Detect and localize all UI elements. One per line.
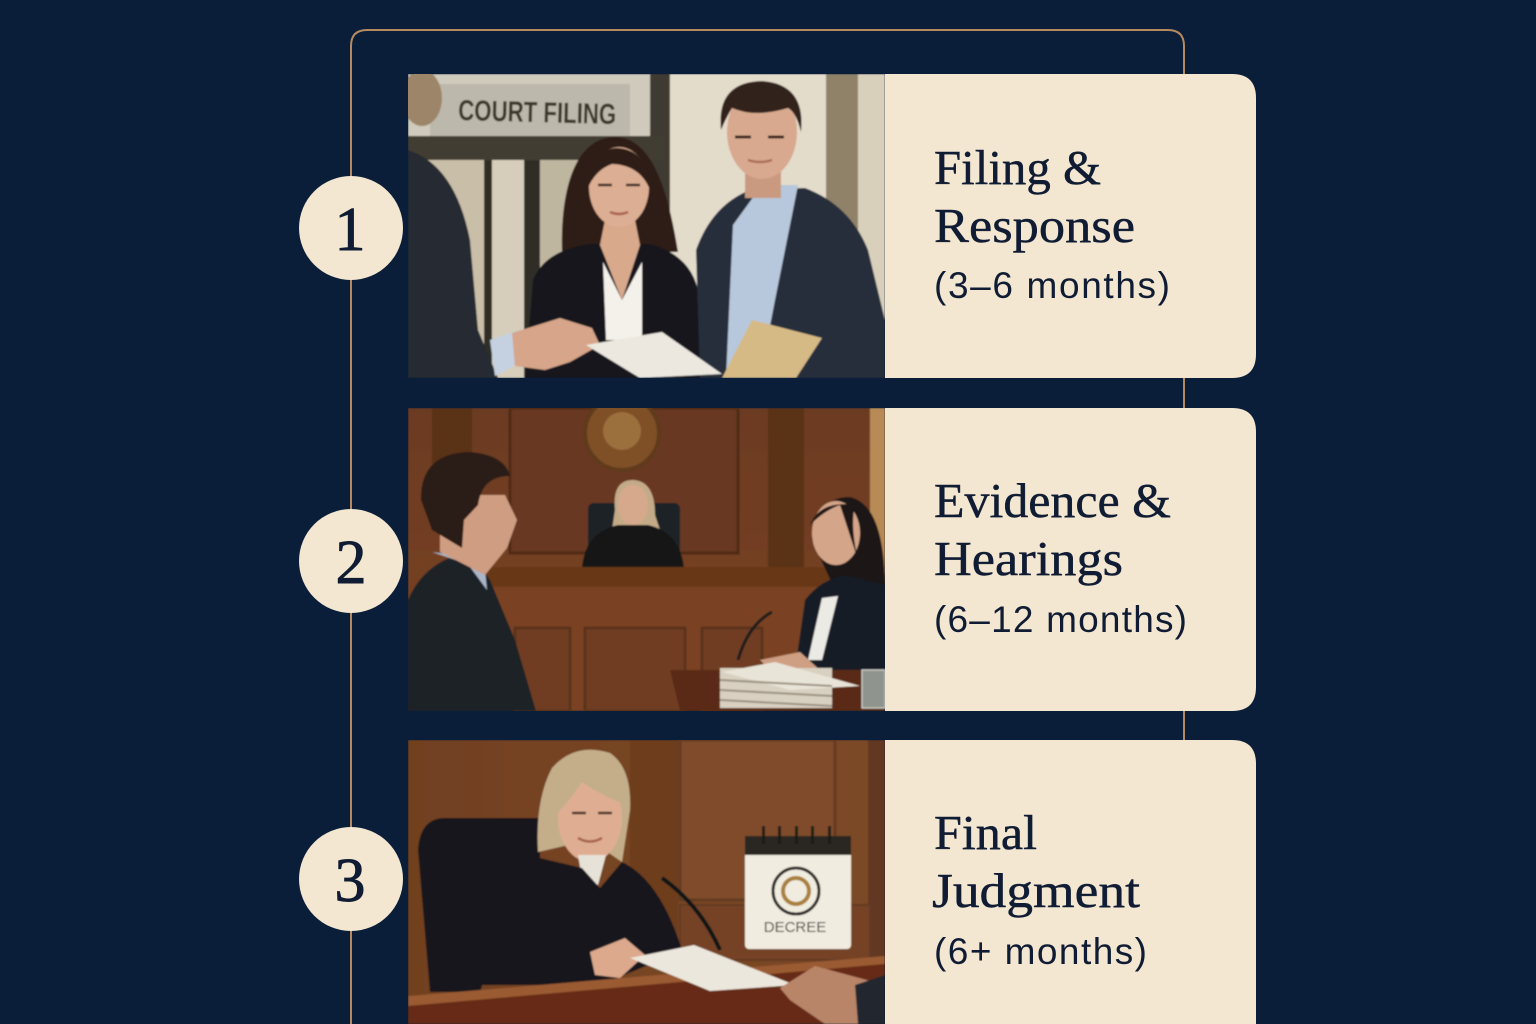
photo: judge handing decree bbox=[408, 740, 885, 1024]
chair bbox=[418, 818, 540, 992]
timeline frame line bbox=[351, 30, 1184, 1024]
bench bbox=[408, 958, 885, 1024]
bench bbox=[485, 567, 830, 711]
judge bbox=[538, 750, 630, 862]
panel: step 2 evidence and hearings: Hearings bbox=[934, 531, 1123, 586]
panel: step 1 filing and response bbox=[402, 70, 1256, 378]
heading: Evidence & bbox=[934, 473, 1171, 528]
hand bbox=[780, 966, 868, 1024]
paper bbox=[586, 332, 722, 378]
document bbox=[630, 945, 795, 991]
microphone bbox=[662, 878, 720, 950]
left figure with hand bbox=[408, 150, 498, 378]
heading: Filing & bbox=[934, 140, 1101, 195]
step number 3: 3 bbox=[334, 847, 366, 915]
sign text: COURT FILING bbox=[458, 95, 617, 131]
photo: court filing exchange bbox=[402, 70, 885, 378]
man bbox=[696, 188, 885, 378]
step number 1 bbox=[299, 176, 403, 280]
woman bbox=[812, 497, 885, 590]
duration: (6+ months) bbox=[934, 931, 1147, 972]
step number 2: 2 bbox=[336, 529, 366, 597]
step number 3 bbox=[299, 827, 403, 931]
glass bbox=[862, 670, 885, 708]
photo: courtroom hearing bbox=[408, 396, 885, 711]
microphone bbox=[738, 612, 772, 660]
panel: step 1 filing and response: Response bbox=[934, 198, 1135, 253]
duration: (3–6 months) bbox=[934, 265, 1170, 306]
seal bbox=[584, 408, 660, 471]
step number 1: 1 bbox=[334, 196, 366, 264]
panel: step 3 final judgment: Judgment bbox=[932, 863, 1140, 918]
step number 2 bbox=[299, 509, 403, 613]
panel: step 3 final judgment bbox=[408, 740, 1256, 1024]
card background bbox=[885, 74, 1256, 378]
heading: Final bbox=[934, 805, 1037, 860]
panel: step 2 evidence and hearings bbox=[408, 396, 1256, 711]
woman bbox=[562, 137, 678, 252]
icon: decree calendar: DECREE bbox=[764, 919, 826, 936]
card background bbox=[885, 740, 1256, 1024]
judge bbox=[588, 502, 680, 551]
icon: decree calendar bbox=[745, 826, 851, 949]
table and papers bbox=[670, 670, 885, 711]
card background bbox=[885, 408, 1256, 711]
infographic canvas bbox=[299, 29, 1256, 1024]
duration: (6–12 months) bbox=[934, 599, 1187, 640]
folder bbox=[722, 320, 822, 378]
man bbox=[408, 552, 536, 711]
